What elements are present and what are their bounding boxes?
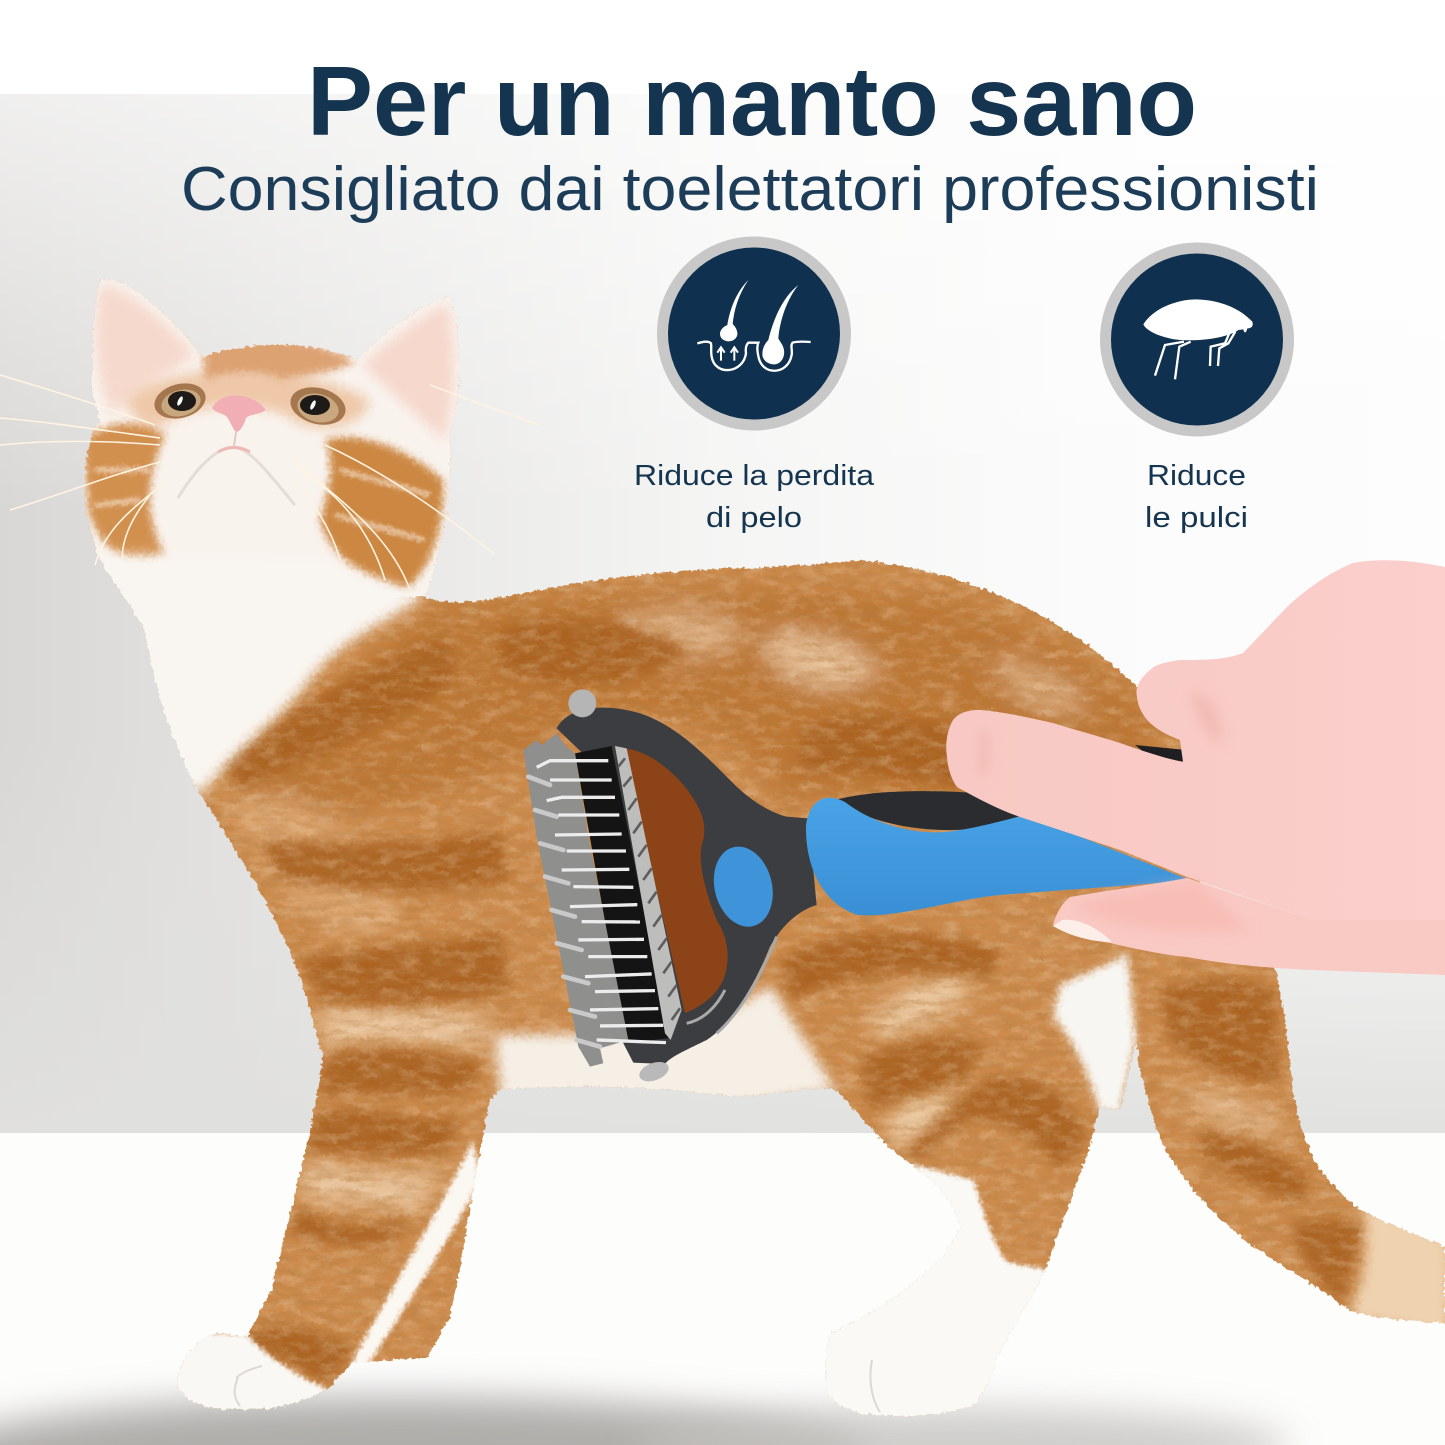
forehead orange xyxy=(203,337,355,380)
cheek stripes xyxy=(95,470,430,540)
caption: hair loss: di pelo xyxy=(706,502,802,534)
subtitle: Consigliato dai toelettatori professionisti xyxy=(181,155,1319,224)
tines xyxy=(537,761,666,1043)
black tine backing xyxy=(575,746,668,1043)
handle blue grip xyxy=(806,798,1190,915)
hand thumb and palm xyxy=(946,560,1445,975)
window showing fur xyxy=(624,748,728,1013)
cat left eye xyxy=(151,378,209,424)
table surface xyxy=(0,1133,1445,1445)
tool head xyxy=(523,689,817,1085)
cat right eye xyxy=(286,382,350,430)
frame highlights xyxy=(687,937,777,1033)
caption: fleas xyxy=(1145,460,1248,534)
handle black grip xyxy=(835,791,1040,830)
fingernail xyxy=(1053,920,1112,942)
white hind leg and paw xyxy=(810,1165,1050,1425)
left ear pink xyxy=(96,285,195,415)
icon: flea xyxy=(1100,242,1294,436)
paw toe lines xyxy=(235,1360,880,1412)
caption: hair loss: Riduce la perdita xyxy=(634,460,875,492)
hand xyxy=(946,560,1445,975)
cat whiskers xyxy=(0,375,540,590)
caption: fleas: Riduce xyxy=(1147,460,1246,492)
rear comb bar xyxy=(615,746,682,1040)
upper body tone xyxy=(230,589,1290,1210)
light fur texture xyxy=(201,560,1370,1390)
right cheek orange xyxy=(320,437,443,590)
blade highlights xyxy=(528,777,600,1047)
frame xyxy=(557,708,817,1064)
cat nose and mouth xyxy=(178,395,295,505)
icon: hair follicles xyxy=(657,236,851,430)
blue button xyxy=(706,840,781,933)
dark stripes xyxy=(220,620,1365,1385)
white chest xyxy=(60,555,425,800)
caption: hair loss xyxy=(634,460,875,534)
handle far end xyxy=(1135,745,1186,762)
front blade xyxy=(523,733,628,1067)
caption: fleas: le pulci xyxy=(1145,502,1248,534)
top screw xyxy=(568,689,596,717)
right ear pink xyxy=(362,303,454,440)
fur texture xyxy=(60,260,1445,1420)
white face and head xyxy=(84,278,461,598)
white patch between leg and tail xyxy=(1053,950,1136,1115)
title: Per un manto sano xyxy=(307,46,1197,156)
tail tip cream xyxy=(1348,1200,1445,1335)
grooming rake tool xyxy=(523,689,1190,1085)
bottom screw xyxy=(637,1058,671,1085)
white front paw xyxy=(176,1332,329,1411)
hand lower finger xyxy=(1053,878,1445,975)
hand shading xyxy=(982,690,1250,932)
white belly xyxy=(495,985,836,1110)
face warm tint xyxy=(125,370,370,427)
cat markings xyxy=(60,250,1445,1425)
cat fur body xyxy=(60,250,1445,1425)
left cheek orange xyxy=(83,424,165,561)
white stripe between front legs xyxy=(350,1140,480,1370)
